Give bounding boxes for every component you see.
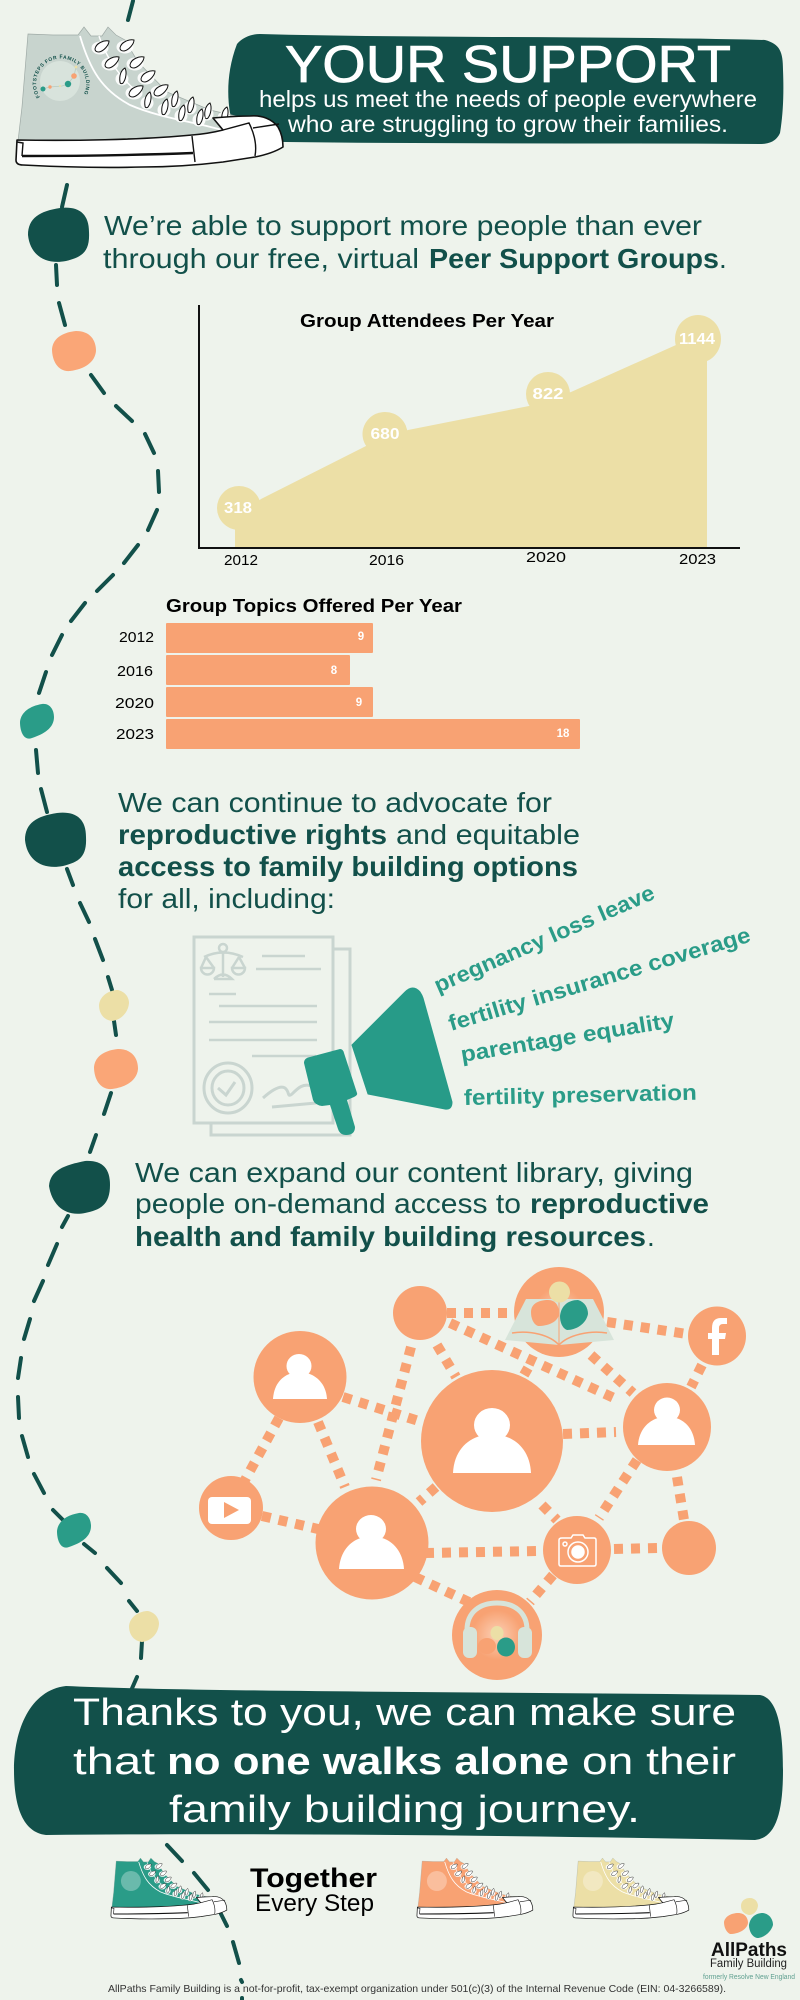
icon: person right [638, 1398, 695, 1445]
text block: advocacy: and equitable [396, 819, 580, 850]
advocacy list: parentage equality [459, 1007, 677, 1067]
icon: legal document [194, 937, 350, 1135]
chart title: Group Topics Offered Per Year [166, 596, 462, 616]
bar chart: group topics offered per year [115, 596, 580, 749]
chart title: Group Attendees Per Year [300, 311, 554, 331]
closing message: no one walks alone [167, 1741, 569, 1783]
data values: 680 [370, 426, 400, 443]
bar values: 9 [358, 631, 364, 643]
together every step: Together [250, 1863, 378, 1893]
data values [224, 331, 715, 517]
dashed journey path [18, 1, 242, 2000]
text block: advocacy: We can continue to advocate for [118, 787, 552, 818]
title: YOUR SUPPORT [285, 36, 731, 94]
bar values [331, 631, 570, 740]
icon: scales of justice [201, 944, 245, 979]
icon: person large [453, 1408, 531, 1473]
bar values: 18 [557, 728, 570, 740]
data values: 318 [224, 500, 252, 517]
bar year labels: 2016 [117, 663, 153, 680]
closing message: Thanks to you, we can make sure [73, 1692, 736, 1734]
closing banner [14, 1686, 783, 1840]
text block: peer support groups: through our free, virtual [103, 243, 419, 274]
bar year labels [115, 629, 154, 743]
logo mark [724, 1898, 773, 1938]
network links [245, 1313, 702, 1602]
subtitle: helps us meet the needs of people everywhere [259, 86, 757, 112]
blob: yellow marker 2 [129, 1611, 159, 1642]
logo: AllPaths Family Building [703, 1898, 795, 1981]
advocacy list: pregnancy loss leave [430, 880, 658, 998]
advocacy list [430, 880, 753, 1110]
text block: content library: people on-demand access to [135, 1188, 521, 1219]
closing message: family building journey. [169, 1789, 640, 1831]
header banner [228, 34, 783, 144]
blob: dark green marker 3 [49, 1161, 110, 1214]
blob: teal marker 1 [20, 704, 54, 739]
icon: camera [559, 1535, 596, 1566]
network diagram [199, 1267, 746, 1680]
icon: teal sneaker [111, 1858, 227, 1919]
icon: main sneaker [15, 26, 284, 168]
icon: megaphone [304, 988, 452, 1135]
year labels [224, 549, 716, 569]
axes [199, 305, 740, 548]
text block: advocacy [118, 787, 580, 914]
badge: Footsteps for Family Building: FOOTSTEPS FOR FAMILY BUILDING [32, 54, 90, 98]
text block: content library: . [647, 1221, 655, 1252]
nodes [199, 1267, 746, 1680]
advocacy list: fertility insurance coverage [445, 922, 753, 1036]
text block: peer support groups: Peer Support Groups [429, 243, 719, 274]
data values: 822 [532, 386, 564, 403]
blob: yellow marker 1 [99, 990, 129, 1021]
icon: yellow sneaker [573, 1858, 689, 1919]
text block: content library: health and family building resources [135, 1221, 646, 1252]
text block: content library [135, 1157, 709, 1252]
bar values: 8 [331, 665, 338, 677]
text block: advocacy: access to family building options [118, 851, 578, 882]
bar values: 9 [356, 697, 362, 709]
subtitle [259, 86, 757, 137]
year labels: 2020 [526, 549, 566, 566]
closing message [73, 1692, 736, 1831]
text block: peer support groups: We’re able to support more people than ever [104, 210, 702, 241]
year labels: 2012 [224, 552, 258, 569]
icon: peach sneaker [417, 1858, 533, 1919]
logo: AllPaths Family Building: formerly Resolve New England [703, 1974, 795, 1981]
icon: book with logo [505, 1282, 614, 1345]
year labels: 2016 [369, 552, 404, 569]
text block: advocacy: for all, including: [118, 883, 335, 914]
blob: peach marker 1 [52, 331, 96, 371]
icon: person top left [273, 1354, 327, 1399]
area [235, 345, 707, 548]
closing message: that [73, 1741, 156, 1783]
text block: content library: We can expand our content library, giving [135, 1157, 693, 1188]
subtitle: who are struggling to grow their families. [287, 111, 728, 137]
advocacy list: fertility preservation [464, 1080, 697, 1110]
icon: seal [204, 1063, 252, 1113]
bar year labels: 2023 [116, 726, 154, 743]
blob: dark green marker 2 [25, 813, 86, 867]
icon: youtube [208, 1497, 251, 1524]
bar year labels: 2020 [115, 695, 154, 712]
year labels: 2023 [679, 551, 716, 568]
blob: peach marker 2 [94, 1049, 138, 1089]
text block: content library: reproductive [530, 1188, 709, 1219]
text block: peer support groups: . [719, 243, 727, 274]
together every step: Every Step [255, 1890, 374, 1917]
text block: advocacy: reproductive rights [118, 819, 387, 850]
area chart: group attendees per year [199, 305, 740, 569]
blob: teal marker 2 [57, 1513, 91, 1548]
blob: dark green marker 1 [28, 208, 89, 262]
icon: headphones with logo [463, 1603, 532, 1658]
together every step [250, 1863, 378, 1917]
closing message: on their [582, 1741, 736, 1783]
footer: AllPaths Family Building is a not-for-profit, tax-exempt organization under 501(c)(3) of the Internal Revenue Code (EIN: 04-3266589). [108, 1983, 726, 1995]
bar year labels: 2012 [119, 629, 154, 646]
icon: person bottom left [339, 1515, 404, 1569]
icon: facebook [708, 1318, 727, 1355]
data point bubbles [217, 315, 721, 530]
text block: peer support groups [103, 210, 727, 274]
bars [166, 623, 580, 749]
data values: 1144 [679, 331, 715, 348]
logo: AllPaths Family Building: AllPaths [711, 1940, 787, 1961]
logo: AllPaths Family Building: Family Building [710, 1958, 787, 1970]
